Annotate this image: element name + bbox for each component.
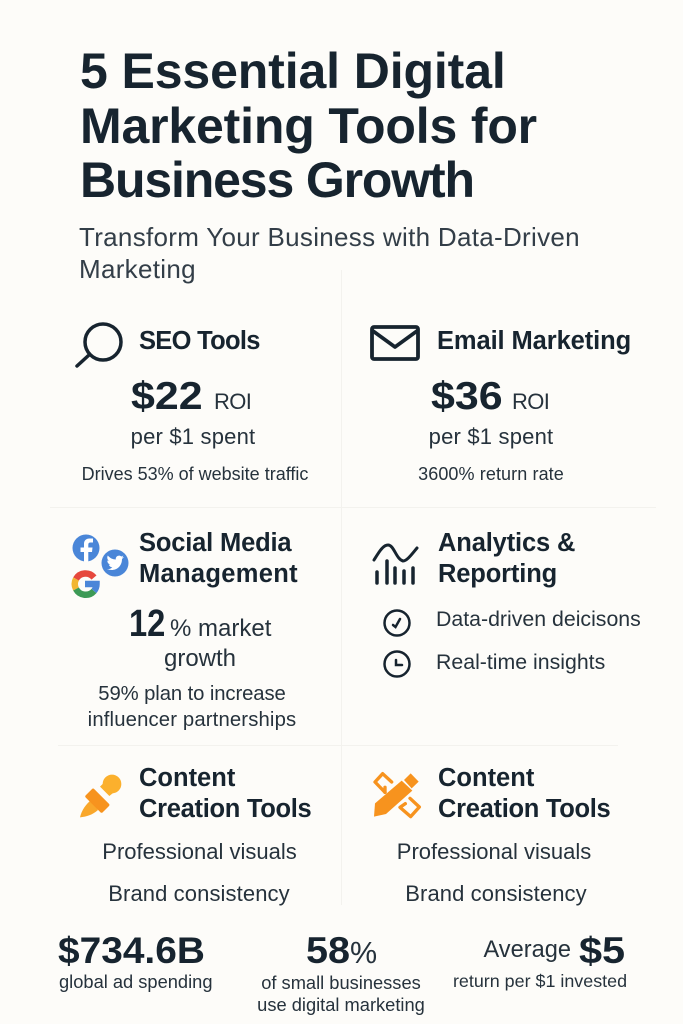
subtitle (79, 222, 580, 284)
title: 5 Essential Digital (80, 43, 506, 99)
heading: Email Marketing: Email Marketing (437, 327, 631, 355)
number: $22: $22 (131, 375, 203, 418)
heading: Content Creation Tools: Content (139, 764, 235, 792)
label (257, 972, 425, 1015)
heading: Social Media Management: Social Media (139, 529, 291, 557)
label: use digital marketing (257, 994, 425, 1014)
unit: ROI: ROI (214, 389, 251, 414)
icon: analytics chart (372, 544, 419, 585)
heading: SEO Tools: SEO Tools (139, 327, 260, 355)
text: growth: growth (164, 645, 236, 672)
icon: social logos (72, 534, 128, 598)
text: influencer partnerships (88, 683, 296, 731)
heading: Content Creation Tools: Creation Tools (438, 795, 610, 823)
stat: $22 ROI (131, 375, 251, 418)
text: brand consistency: Brand consistency (405, 881, 587, 906)
panel: content creation tools left (80, 764, 311, 906)
icon: marker (80, 774, 122, 818)
text: professional visuals: Professional visuals (102, 839, 297, 864)
label: of small businesses (261, 972, 421, 993)
text: real-time insights: Real-time insights (436, 650, 605, 674)
title: Business Growth (80, 152, 474, 208)
panel: social media management (72, 529, 298, 731)
icon: pencil and ruler (373, 772, 422, 818)
text: influencer partnerships: 59% plan to increase (98, 683, 286, 705)
heading: Social Media Management: Management (139, 560, 298, 588)
text: professional visuals: Professional visuals (397, 839, 591, 864)
icon: check circle (383, 609, 411, 637)
number: 12: 12 (129, 603, 165, 645)
subtitle: Marketing (79, 254, 196, 284)
text: % market: % market (170, 615, 271, 642)
icon: envelope (370, 325, 420, 361)
subtitle: Transform Your Business with Data-Driven (79, 222, 580, 252)
text: data-driven decisions: Data-driven deicisons (436, 607, 641, 631)
heading: Content Creation Tools: Content (438, 764, 534, 792)
heading: Social Media Management (139, 529, 298, 588)
text: traffic: Drives 53% of website traffic (82, 464, 308, 484)
title: Marketing Tools for (80, 98, 537, 154)
label: return per $1 invested (453, 971, 627, 991)
panel: email marketing (370, 325, 631, 484)
panel: SEO tools (75, 322, 308, 484)
title (80, 43, 537, 208)
heading: Content Creation Tools (139, 764, 311, 823)
text: influencer partnerships: influencer partnerships (88, 709, 296, 731)
heading: Analytics & Reporting (438, 529, 575, 588)
label: global ad spending (59, 971, 212, 992)
number: 58: 58 (306, 930, 350, 971)
heading: Analytics & Reporting: Reporting (438, 560, 557, 588)
text: Average: Average (484, 937, 571, 963)
number: $5: $5 (579, 930, 625, 971)
heading: Content Creation Tools (438, 764, 610, 823)
text: per $1 spent: per $1 spent (131, 424, 255, 449)
text: return rate: 3600% return rate (418, 464, 564, 484)
stat: average return (453, 930, 627, 991)
stat: 12% market growth (129, 603, 272, 672)
panel: content creation tools right (373, 764, 610, 906)
icon: magnifying glass (75, 322, 123, 368)
text: per $1 spent: per $1 spent (429, 424, 553, 449)
heading: Content Creation Tools: Creation Tools (139, 795, 311, 823)
number: $36: $36 (431, 375, 503, 418)
unit: ROI: ROI (512, 389, 549, 414)
icon: clock (383, 650, 411, 678)
panel: analytics and reporting (372, 529, 641, 678)
number: $734.6B: $734.6B (58, 930, 205, 971)
stat: $36 ROI (431, 375, 549, 418)
heading: Analytics & Reporting: Analytics & (438, 529, 575, 557)
stat: global ad spending (58, 930, 212, 992)
text: brand consistency: Brand consistency (108, 881, 290, 906)
unit: percent: % (350, 936, 377, 970)
stat: small businesses (257, 930, 425, 1015)
